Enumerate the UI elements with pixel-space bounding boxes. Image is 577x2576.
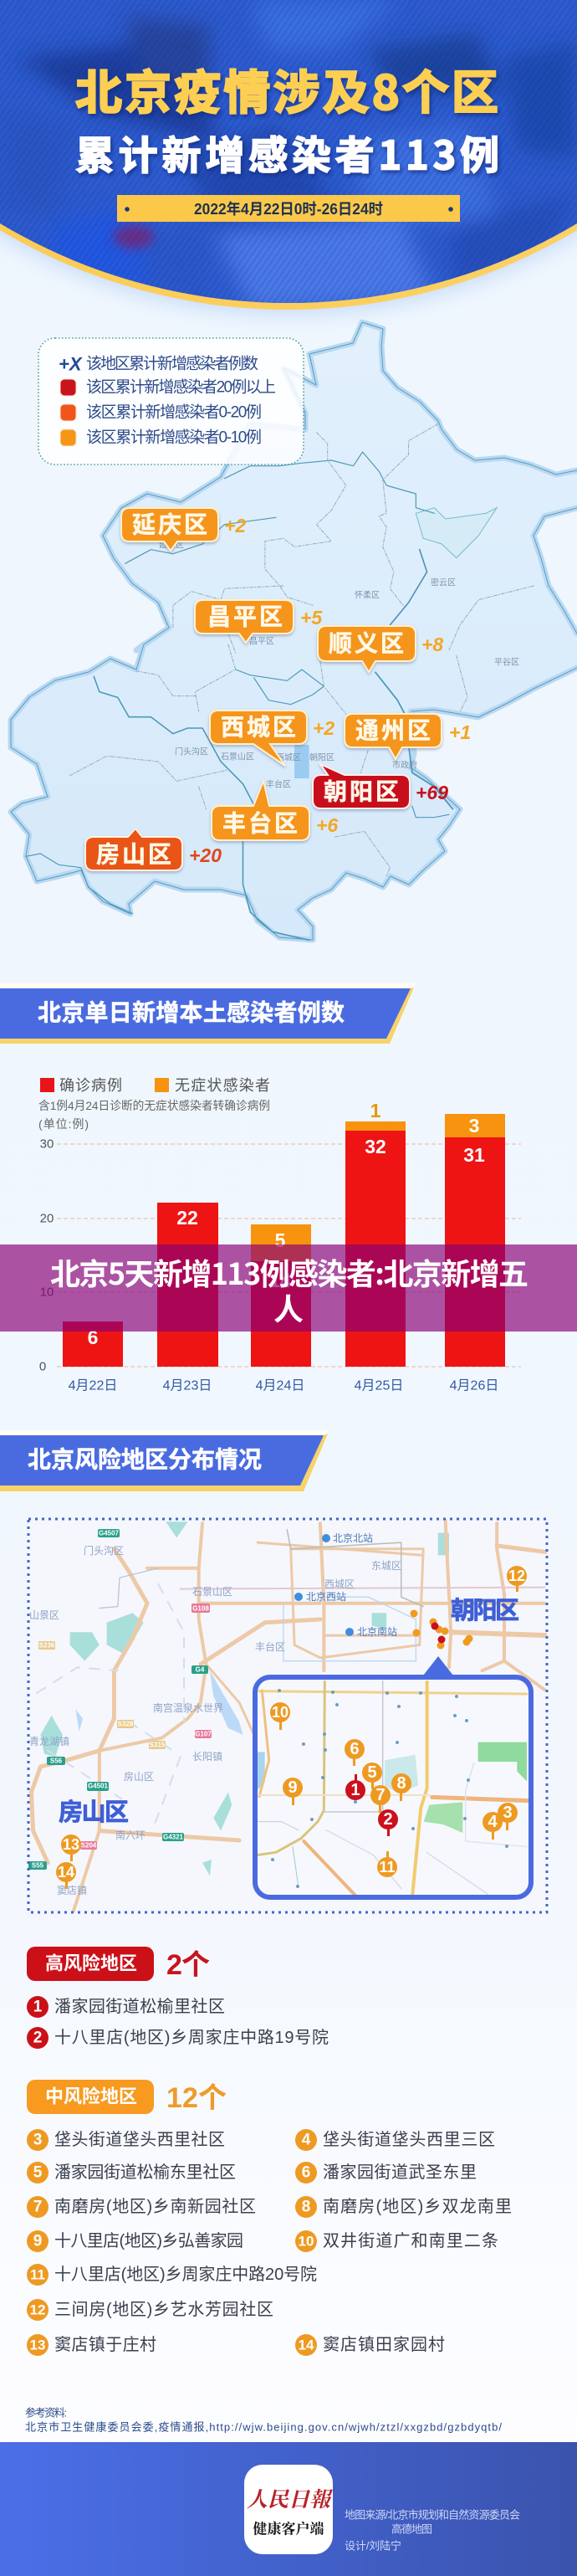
bar chart: 10 xyxy=(40,1285,54,1299)
pin: 8: 8 xyxy=(396,1774,406,1793)
pin: 6: 6 xyxy=(350,1740,360,1758)
item 4: 垡头街道垡头西里三区 xyxy=(323,2130,495,2149)
map: Beijing districts: 延庆区 xyxy=(159,539,184,551)
parks and water xyxy=(40,1521,449,1876)
item 9: 9 xyxy=(33,2233,42,2250)
item 5: 5 xyxy=(33,2164,43,2181)
bar chart: 20 xyxy=(40,1212,54,1225)
bar chart legend: 确诊病例 xyxy=(59,1077,122,1094)
item 14: 14 xyxy=(299,2337,314,2353)
panel: risk map xyxy=(28,1519,547,1912)
pin: 12: 12 xyxy=(508,1568,525,1584)
map: Beijing districts: 丰台区 xyxy=(266,778,291,790)
inset map xyxy=(255,1677,531,1897)
pin: 2 xyxy=(378,1809,398,1836)
pin: 7 xyxy=(370,1785,391,1813)
medium risk list xyxy=(27,2129,512,2356)
credits: 设计/刘陆宁 xyxy=(345,2539,401,2553)
medium risk heading xyxy=(27,2080,227,2114)
pin: 14: 14 xyxy=(58,1864,74,1881)
map: Beijing districts: 怀柔区 xyxy=(355,591,380,601)
railway stations: 北京北站 xyxy=(333,1532,373,1544)
pin: 1 xyxy=(345,1774,365,1800)
pin: 8 xyxy=(391,1773,411,1801)
legend row: +X: 该地区累计新增感染者例数 xyxy=(86,355,258,373)
railway stations xyxy=(294,1532,397,1638)
item 10: 双井街道广和南里二条 xyxy=(323,2231,498,2250)
road signs: G4321 xyxy=(163,1833,184,1841)
road signs: S328 xyxy=(118,1721,134,1727)
footer xyxy=(0,2442,577,2576)
credits xyxy=(345,2509,520,2553)
bar chart legend: 无症状感染者 xyxy=(175,1077,270,1094)
label: Xicheng xyxy=(210,711,334,766)
logo xyxy=(244,2465,334,2554)
inset pointer xyxy=(423,1656,453,1675)
pin: 4 xyxy=(483,1812,503,1840)
title line 2: 累计新增感染者113例 xyxy=(75,124,499,181)
bar: Apr 24: 14 xyxy=(269,1270,291,1291)
logo: 健康客户端 xyxy=(253,2517,324,2538)
bar: Apr 26: 31 xyxy=(463,1144,485,1166)
title line 1: 北京疫情涉及8个区 xyxy=(75,55,498,124)
legend row: orange: 该区累计新增感染者0-10例 xyxy=(86,428,262,447)
bar: Apr 23: 22 xyxy=(176,1207,198,1229)
label: Fengtai xyxy=(212,781,338,840)
references xyxy=(25,2407,502,2434)
medium risk heading: 中风险地区 xyxy=(45,2086,137,2107)
incident dots xyxy=(410,1610,473,1649)
item 3: 垡头街道垡头西里社区 xyxy=(54,2130,225,2149)
pin: 3 xyxy=(498,1803,518,1830)
pin: 5 xyxy=(362,1763,382,1789)
label: Shunyi: +8 xyxy=(421,634,443,655)
item 4: 4 xyxy=(302,2131,311,2149)
bar: Apr 25: 1 xyxy=(370,1100,381,1121)
item 11: 十八里店(地区)乡周家庄中路20号院 xyxy=(54,2265,317,2284)
item 6: 6 xyxy=(302,2164,310,2181)
main roads xyxy=(31,1520,547,1911)
road signs: G108 xyxy=(192,1605,209,1612)
map place labels: 门头沟区 xyxy=(84,1544,124,1557)
bar: Apr 22: 4月22日 xyxy=(69,1379,117,1393)
bar: Apr 24 xyxy=(251,1224,311,1393)
legend box xyxy=(38,338,304,464)
bar chart: 0 xyxy=(39,1359,46,1374)
references: 北京市卫生健康委员会委,疫情通报,http://wjw.beijing.gov.cn/wjwh/ztzl/xxgzbd/gzbdyqtb/ xyxy=(25,2420,502,2434)
section heading: daily new cases: 北京单日新增本土感染者例数 xyxy=(38,999,345,1026)
road signs: G4501 xyxy=(88,1783,109,1789)
label: Fengtai: 丰台区 xyxy=(222,810,298,837)
map place labels: 长阳镇 xyxy=(192,1751,222,1763)
label: Fangshan: +20 xyxy=(189,844,222,866)
logo: 人民日報 xyxy=(247,2483,334,2513)
overlay title band xyxy=(0,1244,577,1332)
bar: Apr 23: 4月23日 xyxy=(163,1379,212,1393)
item 14 xyxy=(295,2334,445,2356)
road signs xyxy=(28,1529,212,1870)
item 2: 十八里店(地区)乡周家庄中路19号院 xyxy=(54,2028,329,2047)
label: Xicheng: +2 xyxy=(313,717,334,739)
bar: Apr 24: 5 xyxy=(275,1229,286,1251)
section heading: daily new cases xyxy=(0,983,416,1044)
label: Changping xyxy=(195,600,323,643)
label: Shunyi: 顺义区 xyxy=(329,631,404,656)
bar: Apr 23 xyxy=(157,1203,218,1393)
medium risk heading: 12个 xyxy=(166,2082,227,2114)
bar: Apr 26: 4月26日 xyxy=(450,1379,498,1393)
label: Fangshan: 房山区 xyxy=(96,842,171,867)
road signs: G4507 xyxy=(99,1530,120,1537)
map place labels: 西城区 xyxy=(324,1578,355,1590)
map place labels: 房山区 xyxy=(124,1770,154,1783)
item 13 xyxy=(27,2334,156,2356)
map: Beijing districts: 石景山区 xyxy=(221,752,254,762)
map place labels xyxy=(29,1544,401,1896)
road signs: S236 xyxy=(39,1642,55,1649)
label: Shunyi xyxy=(318,626,443,672)
pin: 5: 5 xyxy=(367,1763,377,1782)
label: Tongzhou xyxy=(345,714,471,759)
map place labels: 石景山区 xyxy=(192,1586,232,1598)
label: Xicheng: 西城区 xyxy=(221,715,296,740)
district lines south xyxy=(26,644,467,940)
pin: 9 xyxy=(283,1778,303,1805)
district label: Chaoyang: 朝阳区 xyxy=(451,1597,519,1624)
high risk heading xyxy=(27,1947,210,1981)
dotted frame xyxy=(28,1519,547,1912)
legend row: red: 该区累计新增感染者20例以上 xyxy=(86,378,276,397)
section heading: risk areas: 北京风险地区分布情况 xyxy=(28,1446,262,1473)
bar: Apr 22 xyxy=(63,1321,123,1393)
pin: 2: 2 xyxy=(383,1810,393,1829)
high risk list xyxy=(27,1996,329,2049)
map: Beijing districts: 市政府 xyxy=(392,760,417,770)
item 8: 南磨房(地区)乡双龙南里 xyxy=(323,2197,512,2216)
map: Beijing districts: 朝阳区 xyxy=(309,753,334,763)
high risk heading: 2个 xyxy=(166,1949,210,1981)
label: Yanqing xyxy=(121,508,246,551)
credits: 高德地图 xyxy=(391,2522,432,2536)
pin: 7: 7 xyxy=(375,1786,386,1804)
item 14: 窦店镇田家园村 xyxy=(323,2335,445,2354)
pin: 11: 11 xyxy=(379,1859,396,1876)
pin: 9: 9 xyxy=(288,1778,298,1797)
map place labels: 东城区 xyxy=(371,1560,401,1572)
item 1: 潘家园街道松榆里社区 xyxy=(54,1997,225,2016)
date bar xyxy=(117,195,460,222)
pin: 10: 10 xyxy=(272,1704,288,1721)
panel: header xyxy=(0,0,577,315)
map: Beijing districts: 密云区 xyxy=(431,577,456,588)
pin: 3: 3 xyxy=(503,1804,513,1822)
road signs: S56 xyxy=(50,1758,63,1764)
chart note xyxy=(38,1099,270,1131)
bar: Apr 25: 32 xyxy=(365,1136,386,1157)
bar: Apr 26 xyxy=(445,1114,505,1393)
item 12: 三间房(地区)乡艺水芳园社区 xyxy=(54,2300,273,2319)
map place labels: 南六环 xyxy=(115,1829,146,1841)
label: Yanqing: +2 xyxy=(224,515,246,536)
map place labels: 山景区 xyxy=(29,1609,59,1621)
date bar: 2022年4月22日0时-26日24时 xyxy=(194,200,383,218)
map place labels: 窦店镇 xyxy=(57,1885,87,1896)
item 6: 潘家园街道武圣东里 xyxy=(323,2163,477,2182)
label: Fangshan xyxy=(85,829,222,870)
bar: Apr 25: 4月25日 xyxy=(355,1379,403,1393)
road signs: S204 xyxy=(81,1841,97,1850)
item 5: 潘家园街道松榆东里社区 xyxy=(54,2163,236,2182)
credits: 地图来源/北京市规划和自然资源委员会 xyxy=(345,2509,520,2521)
label: Yanqing: 延庆区 xyxy=(132,512,207,537)
legend row: +X: +X xyxy=(59,353,83,375)
item 7: 南磨房(地区)乡南新园社区 xyxy=(54,2197,256,2216)
pin: 4: 4 xyxy=(488,1813,498,1831)
item 13: 窦店镇于庄村 xyxy=(54,2335,156,2354)
map: Beijing districts: 昌平区 xyxy=(249,636,274,646)
chart note: (单位:例) xyxy=(38,1117,89,1131)
bar: Apr 26: 3 xyxy=(469,1115,479,1137)
road signs: S55 xyxy=(32,1861,44,1870)
item 10: 10 xyxy=(299,2233,314,2250)
overlay title band: 北京5天新增113例感染者:北京新增五 xyxy=(50,1250,528,1294)
chart note: 含1例4月24日诊断的无症状感染者转确诊病例 xyxy=(38,1099,270,1112)
map place labels: 丰台区 xyxy=(255,1640,285,1653)
label: Tongzhou: 通州区 xyxy=(355,718,431,743)
railway stations: 北京南站 xyxy=(357,1625,397,1638)
map: Beijing districts: 门头沟区 xyxy=(175,747,208,757)
bar chart: 30 xyxy=(40,1137,54,1152)
item 12: 12 xyxy=(30,2301,45,2318)
map: Beijing districts xyxy=(11,322,577,940)
label: Changping: 昌平区 xyxy=(207,604,283,629)
map: Beijing districts: 西城区 xyxy=(276,753,301,763)
map place labels: 南宫温泉水世界 xyxy=(153,1701,223,1714)
road signs: G107 xyxy=(195,1731,212,1737)
label: Tongzhou: +1 xyxy=(449,721,471,743)
bar: Apr 24: 4月24日 xyxy=(256,1379,304,1393)
overlay title band: 人 xyxy=(273,1285,304,1329)
bar chart xyxy=(39,1100,521,1393)
item 8: 8 xyxy=(302,2198,310,2216)
district label: Fangshan: 房山区 xyxy=(59,1799,129,1826)
bar chart legend xyxy=(40,1077,270,1094)
references: 参考资料: xyxy=(25,2407,67,2419)
road signs: G4 xyxy=(196,1665,205,1674)
item 11: 11 xyxy=(30,2266,45,2283)
item 2: 2 xyxy=(33,2029,42,2047)
pin: 1: 1 xyxy=(350,1781,360,1799)
label: Chaoyang: +69 xyxy=(416,782,448,803)
pin: 6 xyxy=(345,1739,365,1766)
map place labels: 青龙湖镇 xyxy=(29,1735,69,1747)
road signs: S315 xyxy=(150,1741,166,1749)
item 9: 十八里店(地区)乡弘善家园 xyxy=(54,2231,243,2250)
pin: 11 xyxy=(377,1851,397,1877)
pin: 14 xyxy=(56,1862,76,1889)
label: Chaoyang: 朝阳区 xyxy=(324,778,399,805)
item 7: 7 xyxy=(33,2198,42,2216)
pin: 13: 13 xyxy=(63,1836,79,1853)
bar: Apr 25 xyxy=(345,1100,406,1393)
bar: Apr 22: 6 xyxy=(88,1326,98,1348)
label: Chaoyang xyxy=(313,764,448,808)
pin: 12 xyxy=(507,1566,527,1592)
pin: 10 xyxy=(270,1702,290,1730)
item 13: 13 xyxy=(30,2337,45,2353)
item 1: 1 xyxy=(33,1999,43,2015)
high risk heading: 高风险地区 xyxy=(45,1953,137,1973)
railway stations: 北京西站 xyxy=(306,1591,346,1603)
pin: 13 xyxy=(61,1835,81,1861)
section heading: risk areas xyxy=(0,1430,328,1491)
label: Changping: +5 xyxy=(300,607,323,629)
item 3: 3 xyxy=(33,2131,42,2149)
legend row: orange-red: 该区累计新增感染者0-20例 xyxy=(86,403,262,422)
label: Fengtai: +6 xyxy=(316,814,338,836)
map: Beijing districts: 平谷区 xyxy=(494,658,519,668)
reservoirs xyxy=(125,424,534,653)
